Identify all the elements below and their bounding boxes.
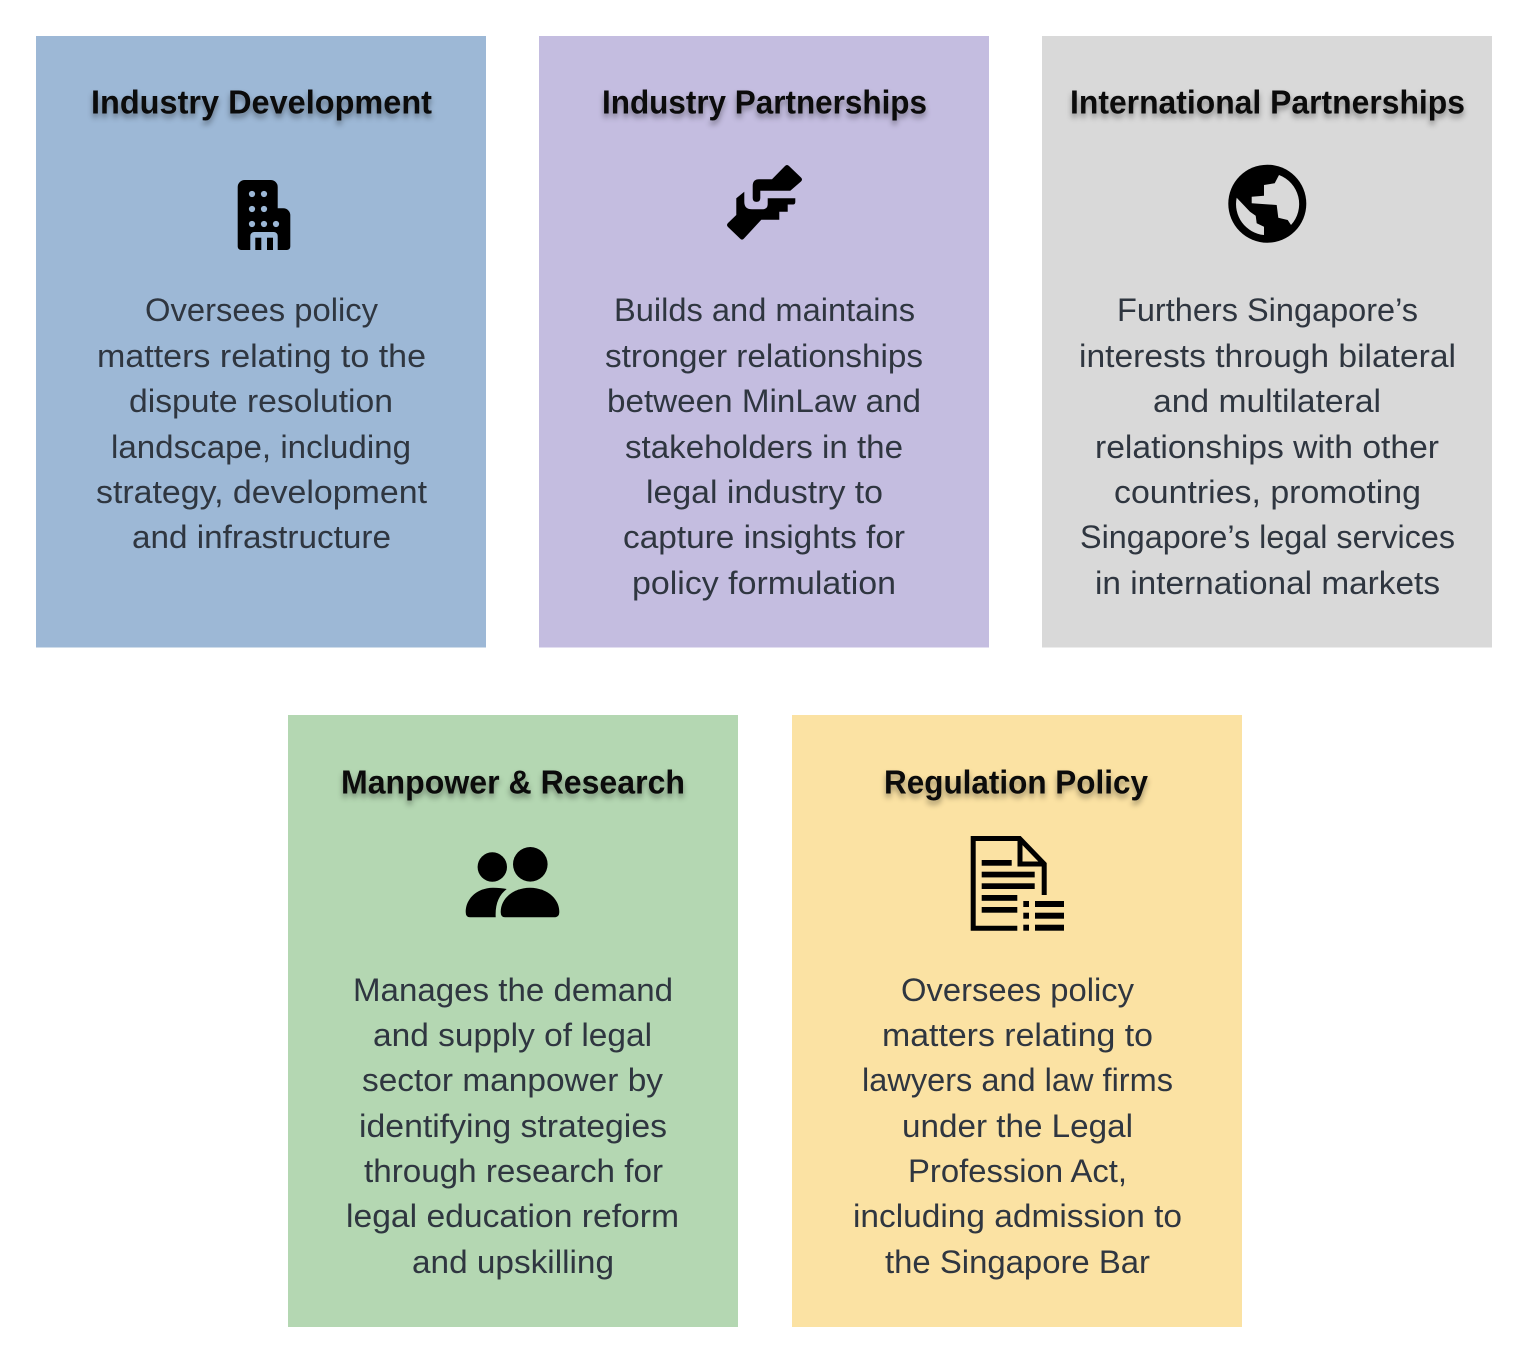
text block: International Partnerships description: and multilateral xyxy=(1153,383,1381,419)
panel background: grey xyxy=(1042,36,1492,648)
panel: Manpower & Research xyxy=(288,715,738,1327)
panel background: blue xyxy=(36,36,486,648)
panel: Industry Partnerships xyxy=(539,36,989,648)
icon: globe xyxy=(1228,165,1306,243)
text block: Industry Partnerships description: Builds and maintains xyxy=(614,292,915,328)
panel: International Partnerships xyxy=(1042,36,1492,648)
text block: International Partnerships description xyxy=(1079,292,1456,601)
text block: Manpower & Research description: legal education reform xyxy=(346,1198,679,1234)
text block: Industry Partnerships description: between MinLaw and xyxy=(607,383,921,419)
text block: Regulation Policy description: Profession Act, xyxy=(908,1153,1127,1189)
icon: document with list xyxy=(973,838,1064,931)
text block: Industry Development description: matters relating to the xyxy=(97,338,426,374)
text block: International Partnerships description: countries, promoting xyxy=(1114,474,1421,510)
text block: Industry Partnerships description: stronger relationships xyxy=(605,338,923,374)
text block: Industry Partnerships description: legal industry to xyxy=(646,474,883,510)
panel: Regulation Policy xyxy=(792,715,1242,1327)
icon: people xyxy=(466,847,559,917)
text block: Regulation Policy description xyxy=(853,972,1182,1280)
text block: Industry Development description: Oversees policy xyxy=(145,292,378,328)
text block: Industry Partnerships description: policy formulation xyxy=(632,565,896,601)
text block: Regulation Policy description: including admission to xyxy=(853,1198,1182,1234)
heading: Industry Partnerships: Industry Partnerships xyxy=(602,84,927,120)
text block: Manpower & Research description: Manages the demand xyxy=(353,972,673,1008)
text block: International Partnerships description: relationships with other xyxy=(1095,429,1439,465)
text block: Industry Development description: strategy, development xyxy=(96,474,427,510)
panel background: purple xyxy=(539,36,989,648)
heading: Regulation Policy: Regulation Policy xyxy=(884,764,1149,800)
heading: International Partnerships: International Partnerships xyxy=(1070,84,1465,120)
text block: Industry Partnerships description: stakeholders in the xyxy=(625,429,903,465)
text block: Manpower & Research description: identifying strategies xyxy=(359,1108,667,1144)
text block: International Partnerships description: Singapore’s legal services xyxy=(1080,519,1455,555)
text block: Industry Partnerships description: capture insights for xyxy=(623,519,905,555)
panel background: green xyxy=(288,715,738,1327)
text block: International Partnerships description: in international markets xyxy=(1095,565,1440,601)
text block: Regulation Policy description: lawyers and law firms xyxy=(862,1062,1173,1098)
icon: building xyxy=(238,180,290,250)
text block: Industry Development description: landscape, including xyxy=(111,429,411,465)
text block: Industry Development description: and infrastructure xyxy=(132,519,391,555)
text block: Manpower & Research description: and upskilling xyxy=(412,1244,614,1280)
heading: Industry Development: Industry Development xyxy=(91,84,432,120)
text block: Manpower & Research description: through research for xyxy=(364,1153,663,1189)
panel background: yellow xyxy=(792,715,1242,1327)
text block: Regulation Policy description: Oversees policy xyxy=(901,972,1134,1008)
text block: Manpower & Research description xyxy=(346,972,679,1280)
text block: International Partnerships description: Furthers Singapore’s xyxy=(1117,292,1418,328)
panel: Industry Development xyxy=(36,36,486,648)
text block: Manpower & Research description: sector manpower by xyxy=(362,1062,663,1098)
heading: Manpower & Research: Manpower & Research xyxy=(341,764,685,800)
text block: Industry Development description xyxy=(96,292,427,555)
text block: Regulation Policy description: matters relating to xyxy=(882,1017,1153,1053)
text block: Manpower & Research description: and supply of legal xyxy=(373,1017,652,1053)
text block: Industry Development description: dispute resolution xyxy=(129,383,393,419)
text block: International Partnerships description: interests through bilateral xyxy=(1079,338,1456,374)
text block: Regulation Policy description: the Singapore Bar xyxy=(885,1244,1150,1280)
text block: Industry Partnerships description xyxy=(605,292,923,601)
icon: handshake xyxy=(727,165,802,240)
text block: Regulation Policy description: under the Legal xyxy=(902,1108,1133,1144)
